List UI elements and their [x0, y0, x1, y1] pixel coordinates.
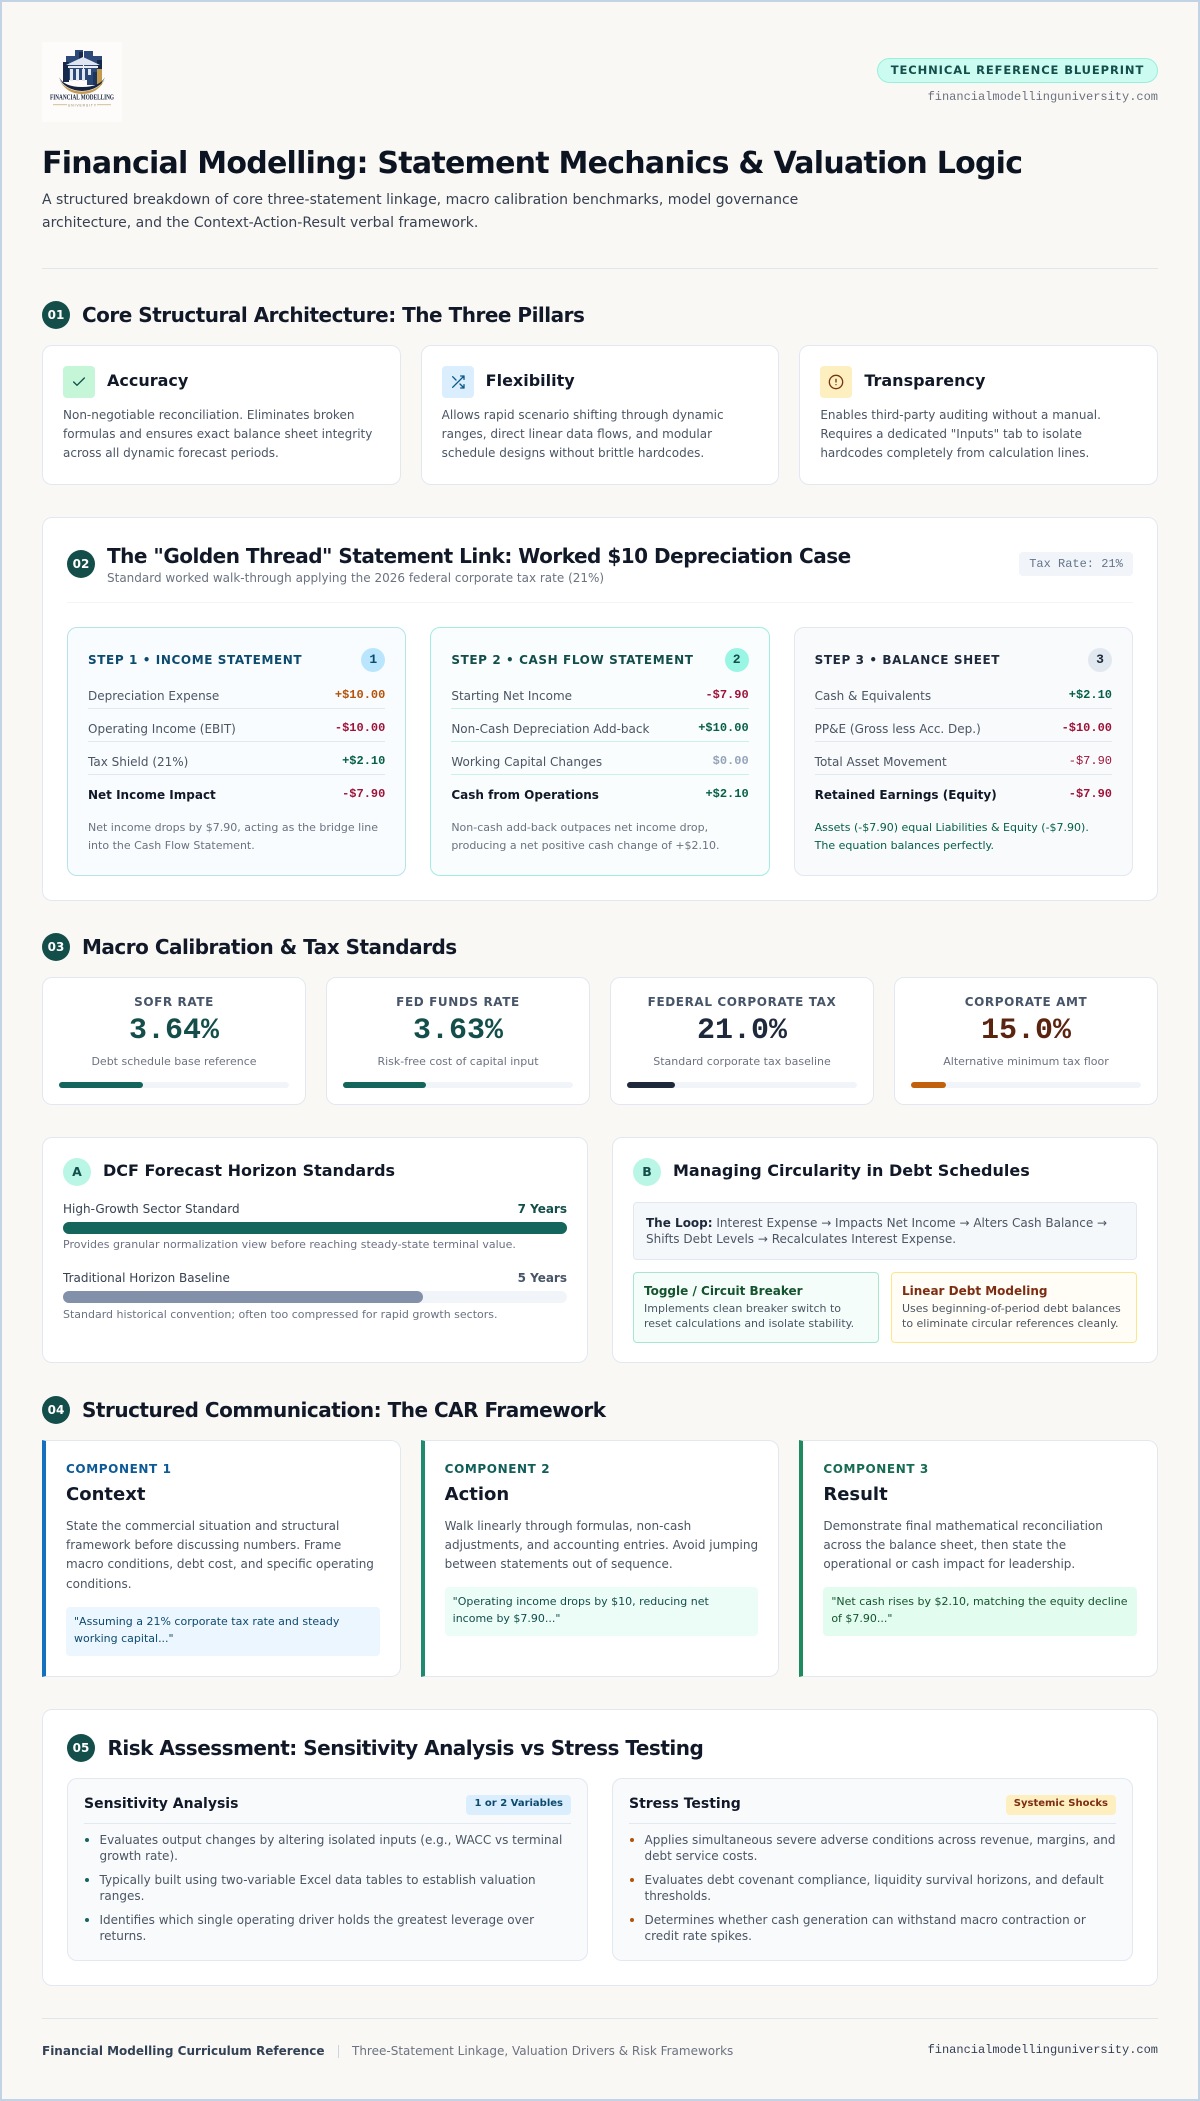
callout text: reset calculations and isolate stability. [644, 1316, 854, 1330]
panel: managing circularity [612, 1137, 1158, 1363]
step heading: STEP 3 • BALANCE SHEET [815, 653, 1000, 667]
tag [1006, 1795, 1116, 1815]
section 03 number [42, 933, 70, 961]
panel: result [799, 1440, 1158, 1677]
row [451, 787, 749, 802]
bullet list: Determines whether cash generation can withstand macro contraction or [644, 1913, 1086, 1927]
step badge: 3 [1096, 652, 1104, 667]
kpi: fed funds rate [326, 977, 590, 1105]
pillar title: Accuracy [107, 371, 188, 390]
pillar title: Transparency [864, 371, 985, 390]
step heading: STEP 2 • CASH FLOW STATEMENT [451, 653, 694, 667]
bar value: 5 Years [518, 1271, 567, 1285]
component text: operational or cash impact for leadership. [823, 1557, 1075, 1571]
panel: risk assessment [42, 1709, 1158, 1986]
row: Non-Cash Depreciation Add-back [451, 722, 649, 736]
description: Alternative minimum tax floor [943, 1055, 1109, 1068]
section 04 number [42, 1396, 70, 1424]
component text [445, 1519, 758, 1571]
bar label: High-Growth Sector Standard [63, 1202, 240, 1216]
pillar text: Enables third-party auditing without a manual. [820, 408, 1101, 422]
callout text: to eliminate circular references cleanly. [902, 1316, 1119, 1330]
callout text [902, 1302, 1121, 1330]
row: +$2.10 [1069, 688, 1112, 702]
description: Standard corporate tax baseline [653, 1055, 831, 1068]
row [451, 676, 749, 709]
section 02 subheading: Standard worked walk-through applying the 2026 federal corporate tax rate (21%) [107, 571, 604, 585]
row: Retained Earnings (Equity) [815, 788, 997, 802]
step badge: 2 [733, 652, 741, 667]
label: CORPORATE AMT [965, 995, 1087, 1009]
section 05 number: 05 [73, 1741, 89, 1755]
the loop callout: Shifts Debt Levels → Recalculates Interest Expense. [646, 1232, 956, 1246]
section 01 heading: Core Structural Architecture: The Three Pillars [82, 303, 584, 327]
step note: Net income drops by $7.90, acting as the bridge line [88, 821, 378, 834]
component title: Result [823, 1484, 888, 1505]
section 01 number: 01 [48, 308, 64, 322]
step note [88, 821, 378, 852]
logo: UNIVERSITY [68, 104, 97, 108]
meter [343, 1082, 573, 1088]
component text [823, 1519, 1103, 1571]
row: -$7.90 [1069, 754, 1112, 768]
row: Cash from Operations [451, 788, 599, 802]
callout title: Linear Debt Modeling [902, 1284, 1048, 1298]
row [815, 742, 1112, 775]
step badge [725, 648, 749, 672]
meter [911, 1082, 1141, 1088]
pillar text [442, 408, 724, 460]
panel: transparency [799, 345, 1158, 485]
bullet list: debt service costs. [644, 1849, 757, 1863]
tag: tax rate: Tax Rate: 21% [1029, 557, 1123, 571]
bullet list: Evaluates debt covenant compliance, liquidity survival horizons, and default [644, 1873, 1104, 1887]
step note: producing a net positive cash change of +$2.10. [451, 839, 720, 852]
section 05 number [67, 1734, 95, 1762]
row: $0.00 [713, 754, 749, 768]
icon: alert circle [820, 366, 852, 398]
badge b [633, 1158, 661, 1186]
tag: tax rate [1019, 552, 1133, 576]
component text: conditions. [66, 1577, 132, 1591]
component label: COMPONENT 2 [445, 1462, 550, 1476]
row: Operating Income (EBIT) [88, 722, 236, 736]
meter [59, 1082, 289, 1088]
panel title: Stress Testing [629, 1796, 741, 1812]
component text [66, 1519, 374, 1591]
description: Risk-free cost of capital input [377, 1055, 539, 1068]
quote: "Assuming a 21% corporate tax rate and steady [74, 1615, 339, 1628]
quote: working capital..." [74, 1632, 174, 1644]
component title: Context [66, 1484, 145, 1505]
row: +$2.10 [342, 754, 385, 768]
subtitle [42, 192, 798, 231]
row [88, 709, 385, 742]
row: Working Capital Changes [451, 755, 602, 769]
component text: macro conditions, debt cost, and specific operating [66, 1557, 374, 1571]
bar label: Traditional Horizon Baseline [63, 1271, 230, 1285]
panel title: Sensitivity Analysis [84, 1796, 238, 1812]
footer title: Financial Modelling Curriculum Reference [42, 2044, 325, 2058]
step note: Non-cash add-back outpaces net income drop, [451, 821, 708, 834]
the loop callout [633, 1202, 1137, 1260]
bar note: Provides granular normalization view before reaching steady-state terminal value. [63, 1238, 516, 1251]
component text: adjustments, and accounting entries. Avoid jumping [445, 1538, 758, 1552]
step note [814, 821, 1089, 852]
step note: The equation balances perfectly. [815, 839, 994, 852]
row [88, 742, 385, 775]
row: -$7.90 [1069, 787, 1112, 801]
row [815, 709, 1112, 742]
logo [42, 42, 122, 122]
panel: stress testing [612, 1778, 1133, 1961]
badge b: B [642, 1164, 652, 1179]
bullet list: Evaluates output changes by altering isolated inputs (e.g., WACC vs terminal [100, 1833, 562, 1847]
value: 15.0% [981, 1014, 1071, 1048]
bullet list: Applies simultaneous severe adverse conditions across revenue, margins, and [644, 1833, 1116, 1847]
row: +$2.10 [705, 787, 749, 801]
row [451, 742, 749, 775]
quote: "Operating income drops by $10, reducing net [453, 1595, 709, 1608]
value: 3.63% [413, 1014, 503, 1048]
footer description: Three-Statement Linkage, Valuation Drivers & Risk Frameworks [352, 2044, 733, 2058]
bullet list: thresholds. [644, 1889, 711, 1903]
panel: action [421, 1440, 779, 1677]
panel title: DCF Forecast Horizon Standards [103, 1161, 395, 1180]
kpi: federal corporate tax [610, 977, 874, 1105]
row: -$7.90 [342, 787, 385, 801]
tag: 1 or 2 Variables [474, 1798, 563, 1809]
bullet list: ranges. [100, 1889, 144, 1903]
panel: dcf forecast horizon standards [42, 1137, 588, 1363]
step note: Assets (-$7.90) equal Liabilities & Equity (-$7.90). [815, 821, 1089, 834]
bar: 5 years [63, 1291, 567, 1303]
component text: framework before discussing numbers. Frame [66, 1538, 341, 1552]
callout text: Implements clean breaker switch to [644, 1302, 841, 1314]
pillar text: Requires a dedicated "Inputs" tab to isolate [820, 427, 1082, 441]
component label: COMPONENT 1 [66, 1462, 172, 1476]
callout text [644, 1302, 854, 1330]
label: FED FUNDS RATE [396, 995, 520, 1009]
quote [66, 1607, 380, 1656]
row: Depreciation Expense [88, 689, 219, 703]
header url: financialmodellinguniversity.com [928, 90, 1158, 104]
badge: technical reference blueprint: TECHNICAL REFERENCE BLUEPRINT [891, 63, 1144, 77]
bar value: 7 Years [518, 1202, 567, 1216]
section 02 number: 02 [73, 557, 89, 571]
panel: context [42, 1440, 401, 1677]
component text: between statements out of sequence. [445, 1557, 673, 1571]
bullet list: growth rate). [100, 1849, 178, 1863]
section 04 heading: Structured Communication: The CAR Framework [82, 1398, 606, 1422]
panel: step 2 cash flow statement [430, 627, 770, 876]
badge: technical reference blueprint [877, 58, 1158, 83]
bullet list: Typically built using two-variable Excel data tables to establish valuation [100, 1873, 536, 1887]
row: +$10.00 [698, 721, 749, 735]
section 04 number: 04 [48, 1403, 64, 1417]
row: -$7.90 [705, 688, 749, 702]
icon: shuffle [442, 366, 474, 398]
section 01 number [42, 301, 70, 329]
bullet list [85, 1833, 562, 1943]
panel: step 3 balance sheet [794, 627, 1133, 876]
panel: flexibility [421, 345, 779, 485]
subtitle: A structured breakdown of core three-statement linkage, macro calibration benchmarks, model governance [42, 192, 798, 208]
badge a [63, 1158, 91, 1186]
bar note: Standard historical convention; often too compressed for rapid growth sectors. [63, 1308, 498, 1321]
step badge [1088, 648, 1112, 672]
label: SOFR RATE [134, 995, 214, 1009]
row: Net Income Impact [88, 788, 216, 802]
callout text: Uses beginning-of-period debt balances [902, 1302, 1121, 1314]
row [451, 709, 749, 742]
row: Tax Shield (21%) [88, 755, 188, 769]
bar: 7 years [63, 1222, 567, 1234]
quote: of $7.90..." [831, 1612, 892, 1624]
description: Debt schedule base reference [91, 1055, 257, 1068]
pillar text: Non-negotiable reconciliation. Eliminates broken [63, 408, 354, 422]
panel: step 1 income statement [67, 627, 406, 876]
quote [823, 1587, 1137, 1636]
row: Starting Net Income [451, 689, 572, 703]
kpi: sofr rate [42, 977, 306, 1105]
bullet list: credit rate spikes. [644, 1929, 752, 1943]
pillar text: hardcodes completely from calculation lines. [820, 446, 1089, 460]
quote: income by $7.90..." [453, 1612, 560, 1624]
section 05 heading: Risk Assessment: Sensitivity Analysis vs Stress Testing [108, 1736, 703, 1760]
component text: Walk linearly through formulas, non-cash [445, 1519, 691, 1533]
section 03 number: 03 [48, 940, 64, 954]
row: +$10.00 [335, 688, 385, 702]
panel: accuracy [42, 345, 401, 485]
pillar text [63, 408, 372, 460]
pillar title: Flexibility [486, 371, 575, 390]
quote [445, 1587, 758, 1636]
section 02 heading: The "Golden Thread" Statement Link: Worked $10 Depreciation Case [107, 544, 851, 568]
component text: State the commercial situation and structural [66, 1519, 339, 1533]
component label: COMPONENT 3 [823, 1462, 929, 1476]
step note [451, 821, 720, 852]
title: Financial Modelling: Statement Mechanics & Valuation Logic [42, 146, 1022, 181]
row [88, 676, 385, 709]
footer url: financialmodellinguniversity.com [928, 2043, 1158, 2057]
pillar text: across all dynamic forecast periods. [63, 446, 279, 460]
row: -$10.00 [1062, 721, 1112, 735]
section 02 number [67, 550, 95, 578]
step badge: 1 [369, 652, 377, 667]
section 03 heading: Macro Calibration & Tax Standards [82, 935, 457, 959]
bullet list: Identifies which single operating driver holds the greatest leverage over [100, 1913, 534, 1927]
skyline [66, 50, 102, 80]
pillar text [820, 408, 1101, 460]
pillar text: ranges, direct linear data flows, and modular [442, 427, 712, 441]
panel: golden thread frame [42, 517, 1158, 901]
component title: Action [445, 1484, 509, 1505]
bullet list: returns. [100, 1929, 146, 1943]
pillar text: formulas and ensures exact balance sheet integrity [63, 427, 372, 441]
meter [627, 1082, 857, 1088]
value: 21.0% [697, 1014, 787, 1048]
tag [466, 1795, 571, 1815]
kpi: corporate amt [894, 977, 1158, 1105]
row [815, 787, 1112, 802]
subtitle: architecture, and the Context-Action-Result verbal framework. [42, 215, 478, 231]
callout title: Toggle / Circuit Breaker [644, 1284, 803, 1298]
bullet list [630, 1833, 1116, 1943]
row: Total Asset Movement [815, 755, 947, 769]
value: 3.64% [129, 1014, 219, 1048]
pillar text: schedule designs without brittle hardcodes. [442, 446, 704, 460]
the loop callout: The Loop: Interest Expense → Impacts Net Income → Alters Cash Balance → [646, 1216, 1107, 1230]
panel: sensitivity analysis [67, 1778, 588, 1961]
component text: across the balance sheet, then state the [823, 1538, 1066, 1552]
label: FEDERAL CORPORATE TAX [648, 995, 836, 1009]
row: Cash & Equivalents [815, 689, 931, 703]
row [88, 787, 385, 802]
row: -$10.00 [335, 721, 385, 735]
quote: "Net cash rises by $2.10, matching the equity decline [831, 1595, 1128, 1608]
callout: toggle [633, 1272, 879, 1343]
panel title: Managing Circularity in Debt Schedules [673, 1161, 1030, 1180]
step heading: STEP 1 • INCOME STATEMENT [88, 653, 302, 667]
callout: linear debt [891, 1272, 1137, 1343]
step note: into the Cash Flow Statement. [88, 839, 255, 852]
component text: Demonstrate final mathematical reconciliation [823, 1519, 1103, 1533]
badge a: A [72, 1164, 82, 1179]
pillar text: Allows rapid scenario shifting through dynamic [442, 408, 724, 422]
row [815, 676, 1112, 709]
row: PP&E (Gross less Acc. Dep.) [815, 722, 981, 736]
tag: Systemic Shocks [1014, 1798, 1108, 1809]
icon: check [63, 366, 95, 398]
step badge [361, 648, 385, 672]
